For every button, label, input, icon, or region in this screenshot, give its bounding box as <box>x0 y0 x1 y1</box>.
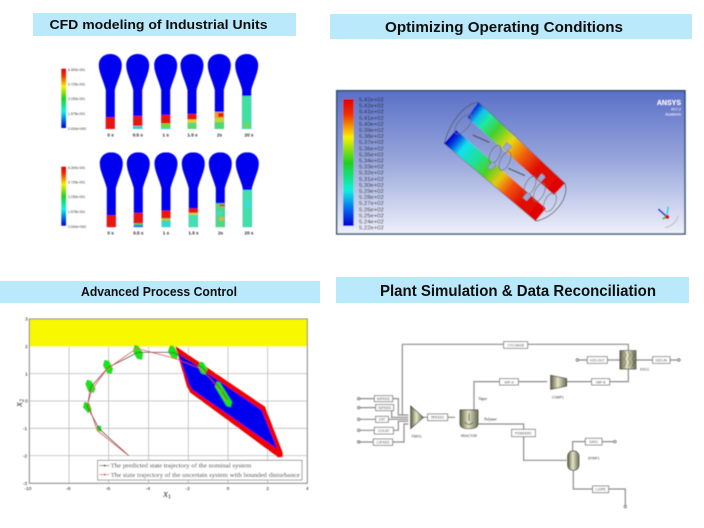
chart legend: The state trajectory of the uncertain system with bounded disturbance <box>111 472 300 479</box>
legend: temperature colour bar: 5.37e+02 <box>359 140 384 146</box>
equipment names: REACTOR <box>461 434 478 438</box>
stream label boxes: RFEED1 <box>431 416 444 420</box>
green reachable tubes <box>83 345 232 431</box>
labels: bottom row time stamps: 0.5 s <box>133 230 144 236</box>
heading: Plant Simulation & Data Reconciliation: Plant Simulation & Data Reconciliation <box>380 283 656 300</box>
heading: Optimizing Operating Conditions: Optimizing Operating Conditions <box>385 19 623 36</box>
panel: invariant set state-space chart <box>14 317 309 501</box>
labels: top row time stamps <box>107 132 254 138</box>
legend: temperature colour bar: 5.26e+02 <box>359 207 384 213</box>
heading: Optimizing Operating Conditions <box>330 14 692 39</box>
stream label boxes: H2O-OUT <box>590 358 605 362</box>
legend: temperature colour bar: 5.42e+02 <box>359 98 384 104</box>
chart legend: The predicted state trajectory of the nominal system <box>111 463 251 470</box>
labels: top row time stamps: 2s <box>217 132 222 138</box>
legend: temperature colour bar: 5.24e+02 <box>359 220 384 226</box>
equipment: compressor <box>551 375 567 389</box>
heading: Plant Simulation & Data Reconciliation <box>336 277 689 303</box>
equipment: mixer <box>411 406 423 429</box>
legend: bottom row colour scale: 3.150e-001 <box>68 195 85 199</box>
equipment names: EXC1 <box>640 368 649 372</box>
equipment names: FMIX1 <box>412 434 422 438</box>
legend: top row colour scale: 0.000e+000 <box>68 127 86 131</box>
stream label boxes: H2O-IN <box>656 358 668 362</box>
labels: top row time stamps: 1 s <box>163 132 169 138</box>
equipment names: COMP1 <box>552 395 564 399</box>
legend: bottom row colour scale <box>61 166 86 229</box>
yellow constraint band <box>29 319 307 346</box>
chart: top row flasks <box>98 54 259 130</box>
labels: bottom row time stamps: 0 s <box>107 230 114 236</box>
labels: top row time stamps: 1.5 s <box>187 132 198 138</box>
panel: plant flowsheet <box>357 342 680 508</box>
panel: ANSYS temperature contour <box>337 91 685 234</box>
legend: temperature colour bar: 5.27e+02 <box>359 201 384 207</box>
labels: bottom row time stamps: 2s <box>218 230 223 236</box>
legend: top row colour scale: 4.725e-001 <box>68 83 85 87</box>
stream label boxes: CAT <box>379 418 385 422</box>
legend: temperature colour bar: 5.30e+02 <box>359 183 384 189</box>
stream label boxes: CYCGAGB <box>507 343 525 347</box>
stream label boxes: N2FEED <box>377 397 390 401</box>
axis tick labels: 4 <box>306 486 309 492</box>
state trajectories <box>87 348 228 456</box>
chart: bottom row flasks <box>99 152 259 228</box>
legend: temperature colour bar: 5.29e+02 <box>359 189 384 195</box>
ANSYS logo text: R17.2 <box>671 108 681 112</box>
axis title: x2: x <box>14 402 25 407</box>
stream label boxes: H2FEED <box>378 406 392 410</box>
rotated reactor cross-section <box>444 102 566 221</box>
axis tick labels <box>23 317 309 492</box>
axis tick labels: 2 <box>25 344 28 350</box>
process streams <box>359 344 679 507</box>
equipment: heat exchanger <box>620 351 636 369</box>
legend: temperature colour bar: 5.35e+02 <box>359 152 384 158</box>
heading: CFD modeling of Industrial Units: CFD modeling of Industrial Units <box>50 17 268 32</box>
labels: bottom row time stamps: 1.5 s <box>188 230 199 236</box>
labels: top row time stamps: 0.5 s <box>133 132 143 138</box>
legend: bottom row colour scale: 1.575e-001 <box>68 210 85 214</box>
ANSYS logo text <box>657 100 681 116</box>
axis tick labels: -3 <box>23 481 27 487</box>
equipment names: Vapor <box>478 397 488 401</box>
legend: temperature colour bar: 5.25e+02 <box>359 213 384 219</box>
labels: bottom row time stamps: 20 s <box>245 230 254 236</box>
legend: top row colour scale: 3.150e-001 <box>68 97 85 101</box>
legend: temperature colour bar: 5.34e+02 <box>359 158 384 164</box>
legend: temperature colour bar: 5.22e+02 <box>359 226 384 232</box>
ANSYS logo text: Academic <box>665 112 681 116</box>
axis tick labels: 1 <box>25 371 28 377</box>
legend: temperature colour bar: 5.41e+02 <box>359 116 384 122</box>
stream end markers <box>357 359 680 508</box>
labels: top row time stamps: 0 s <box>107 132 114 138</box>
legend: bottom row colour scale: 4.725e-001 <box>68 181 85 185</box>
equipment names: Polymer <box>484 417 497 421</box>
legend: temperature colour bar: 5.42e+02 <box>359 104 384 110</box>
ANSYS logo text: ANSYS <box>657 100 681 107</box>
axis tick labels: 3 <box>25 317 28 323</box>
legend: temperature colour bar: 5.36e+02 <box>359 146 384 152</box>
plot frame and grid <box>29 319 307 483</box>
stream label boxes: COCAT <box>378 429 389 433</box>
heading: Advanced Process Control: Advanced Process Control <box>81 285 237 299</box>
legend: temperature colour bar <box>343 98 384 232</box>
labels: bottom row time stamps: 1 s <box>163 230 170 236</box>
panel: CFD flask contours <box>61 54 259 236</box>
legend: top row colour scale: 6.300e-001 <box>68 68 85 72</box>
chart legend <box>98 460 302 480</box>
axis title: x1: 1 <box>168 494 171 501</box>
heading: Advanced Process Control <box>0 281 320 303</box>
axis tick labels: 2 <box>266 486 269 492</box>
legend: temperature colour bar: 5.32e+02 <box>359 171 384 177</box>
legend: bottom row colour scale: 0.000e+000 <box>68 225 86 229</box>
axis tick labels: -8 <box>66 486 71 492</box>
stream label boxes: LLDPE <box>595 488 607 492</box>
legend: temperature colour bar: 5.33e+02 <box>359 165 384 171</box>
axis tick labels: -2 <box>185 486 190 492</box>
axis tick labels: -1 <box>23 426 27 432</box>
legend: top row colour scale <box>61 68 86 131</box>
labels: bottom row time stamps <box>107 230 254 236</box>
icon: coordinate axes triad <box>658 207 678 228</box>
heading: CFD modeling of Industrial Units <box>33 13 296 36</box>
equipment: stripper <box>568 451 579 470</box>
equipment names <box>412 368 649 461</box>
axis tick labels: -10 <box>24 486 32 492</box>
stream label boxes: C2FEED <box>376 441 390 445</box>
legend: temperature colour bar: 5.39e+02 <box>359 128 384 134</box>
axis tick labels: 0 <box>227 486 230 492</box>
axis tick labels: -6 <box>106 486 110 492</box>
terminal set: red outer and blue inner polygons <box>175 346 283 457</box>
equipment names: STRIP1 <box>588 457 600 461</box>
axis tick labels: 0 <box>25 399 28 405</box>
legend: temperature colour bar: 5.28e+02 <box>359 195 384 201</box>
legend: temperature colour bar: 5.41e+02 <box>359 110 384 116</box>
legend: top row colour scale: 1.575e-001 <box>68 112 85 116</box>
labels: top row time stamps: 20 s <box>245 132 254 138</box>
stream label boxes: VAP-A <box>504 380 515 384</box>
axis title: x2: 2 <box>19 399 26 402</box>
stream label boxes <box>373 342 670 493</box>
background frame <box>337 91 685 234</box>
legend: temperature colour bar: 5.38e+02 <box>359 134 384 140</box>
equipment: reactor <box>460 410 478 429</box>
legend: bottom row colour scale: 6.300e-001 <box>68 166 85 170</box>
axis tick labels: -2 <box>23 453 27 459</box>
legend: temperature colour bar: 5.40e+02 <box>359 122 384 128</box>
legend: temperature colour bar: 5.31e+02 <box>359 177 384 183</box>
stream label boxes: POWDER1 <box>515 431 532 435</box>
stream label boxes: VAP-B <box>596 380 606 384</box>
stream label boxes: GAS1 <box>589 440 598 444</box>
axis tick labels: -4 <box>146 486 150 492</box>
axis title: x1: x <box>163 489 168 500</box>
